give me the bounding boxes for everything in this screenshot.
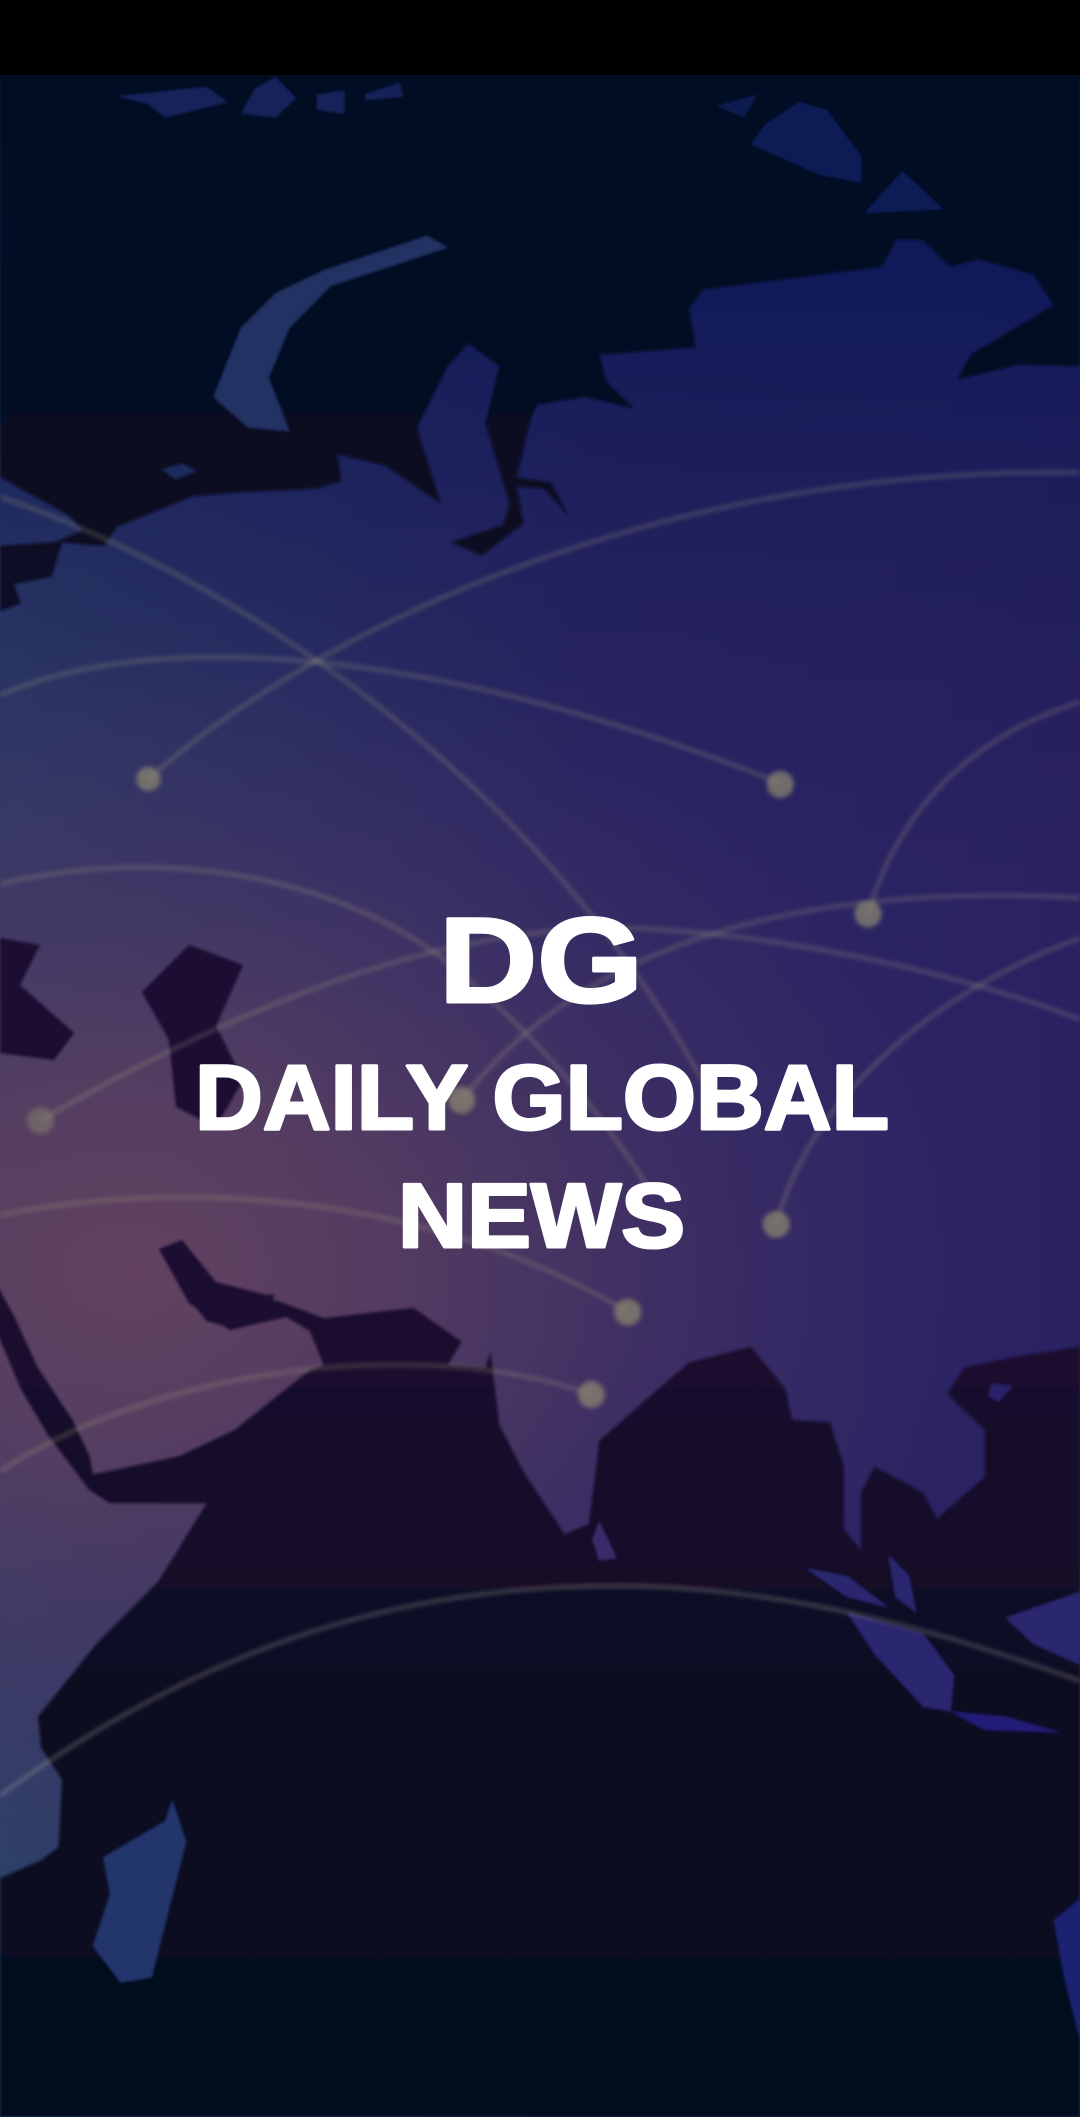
- city dots: [27, 767, 882, 1408]
- flight route arcs and city dots: [0, 472, 1080, 1796]
- logo initials: DG: [439, 892, 643, 1028]
- land: south asia, africa and southeast asia: [0, 1284, 1080, 2117]
- land: persian gulf strip: [159, 1240, 290, 1330]
- land: northern asia and arctic coast: [0, 60, 1080, 611]
- title line 2: NEWS: [398, 1166, 685, 1267]
- title block: [195, 892, 889, 1267]
- land: black sea coast: [0, 938, 74, 1060]
- route arcs: [0, 472, 1080, 1796]
- top black bar: [0, 0, 1080, 75]
- land: caspian sea: [142, 945, 243, 1127]
- title line 1: DAILY GLOBAL: [195, 1047, 889, 1149]
